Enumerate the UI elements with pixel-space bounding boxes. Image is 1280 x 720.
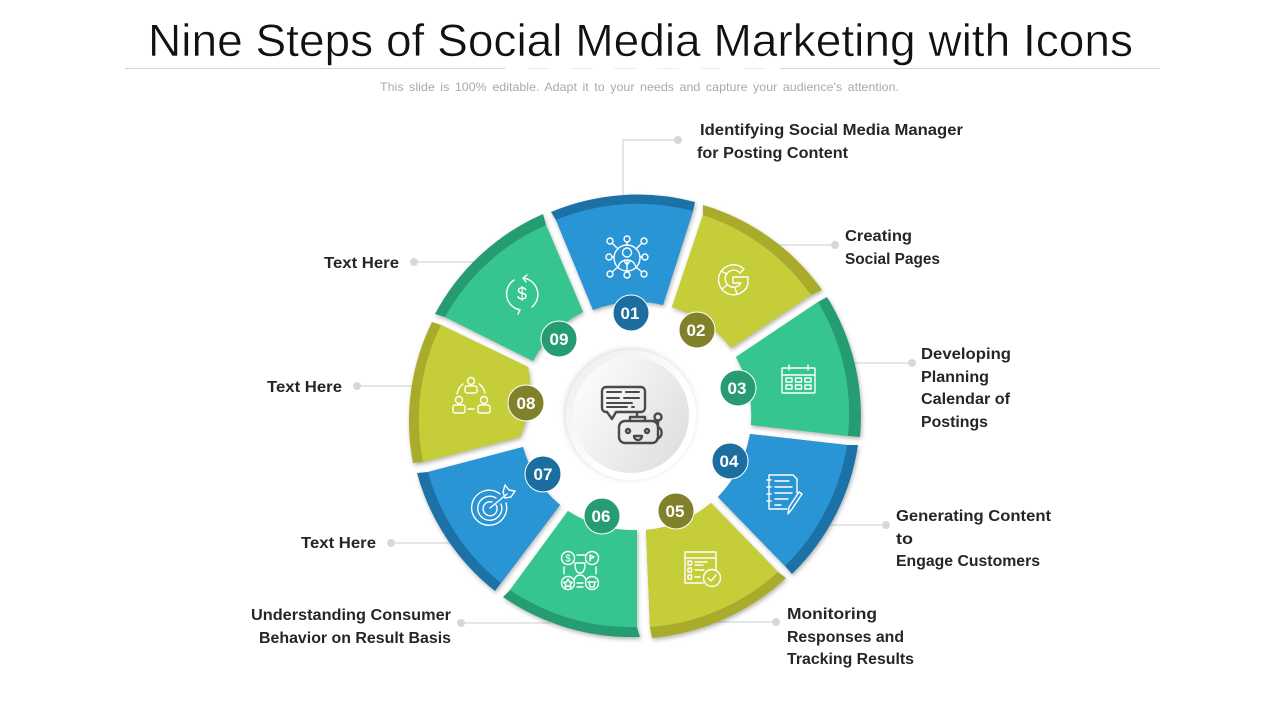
- title: Nine Steps of Social Media Marketing with Icons: [148, 15, 1133, 66]
- label 01: Identifying Social Media Manager: [700, 122, 963, 139]
- badge 05: 05: [666, 502, 684, 521]
- badge 07: [525, 456, 561, 492]
- badge 01: 01: [621, 304, 639, 323]
- label 07: Text Here: [301, 535, 376, 552]
- label 03: Postings: [921, 414, 988, 431]
- segment 02: olive: [672, 205, 822, 348]
- badge 04: [712, 443, 748, 479]
- icon: target with arrow: [472, 485, 515, 525]
- icon: social media manager network: [606, 236, 648, 278]
- label 06: Understanding Consumer: [251, 607, 451, 624]
- badge 01: [613, 295, 649, 331]
- badge 09: [541, 321, 577, 357]
- label 04: Engage Customers: [896, 553, 1040, 570]
- badge 05: [658, 493, 694, 529]
- icon: dollar cycle: [507, 275, 538, 314]
- badge 06: 06: [592, 507, 610, 526]
- badge 09: 09: [550, 330, 568, 349]
- badge 08: [508, 385, 544, 421]
- label 04: Generating Content: [896, 508, 1052, 525]
- label 03: [921, 346, 1011, 431]
- label 05: Responses and: [787, 629, 904, 646]
- icon: notebook and pen: [767, 475, 802, 514]
- icon: team cycle: [453, 378, 490, 413]
- badge 03: 03: [728, 379, 746, 398]
- icon: calendar: [782, 365, 815, 393]
- label 08: Text Here: [267, 379, 342, 396]
- icon: consumer behaviour: $: [565, 554, 571, 564]
- label 04: to: [896, 531, 913, 548]
- label 03: Planning: [921, 369, 989, 386]
- segment 08: olive: [409, 322, 530, 463]
- label 01: [697, 122, 963, 162]
- label 03: Calendar of: [921, 391, 1011, 408]
- label 04: [896, 508, 1052, 570]
- segment 07: blue: [417, 447, 560, 591]
- label 06: Behavior on Result Basis: [259, 630, 451, 647]
- label 02: [845, 228, 940, 268]
- label 01: for Posting Content: [697, 145, 849, 162]
- segment 09: green: [435, 214, 583, 361]
- title rule: [125, 68, 1160, 69]
- label 05: Tracking Results: [787, 651, 914, 668]
- segment 05: olive: [646, 503, 786, 638]
- icon: dollar cycle: $: [517, 284, 527, 304]
- badge 03: [720, 370, 756, 406]
- icon: chatbot: [602, 387, 662, 443]
- label 02: Creating: [845, 228, 912, 245]
- segment 03: green: [736, 297, 861, 437]
- segment 06: green: [503, 511, 640, 637]
- segment 01: blue: [551, 195, 695, 310]
- badge 04: 04: [720, 452, 739, 471]
- label 05: [787, 606, 914, 668]
- badge 02: [679, 312, 715, 348]
- leader lines: [353, 136, 916, 627]
- label 05: Monitoring: [787, 606, 877, 623]
- label 06: [251, 607, 451, 647]
- icon: google G: [719, 265, 748, 295]
- badge 08: 08: [517, 394, 535, 413]
- badge 02: 02: [687, 321, 705, 340]
- label 02: Social Pages: [845, 251, 940, 268]
- segment 04: blue: [718, 434, 858, 574]
- label 03: Developing: [921, 346, 1011, 363]
- subtitle: This slide is 100% editable. Adapt it to your needs and capture your audience's attention.: [380, 80, 899, 94]
- centre hub: [566, 350, 696, 480]
- badge 07: 07: [534, 465, 552, 484]
- badge 06: [584, 498, 620, 534]
- label 09: Text Here: [324, 255, 399, 272]
- icon: checklist monitoring: [685, 552, 720, 586]
